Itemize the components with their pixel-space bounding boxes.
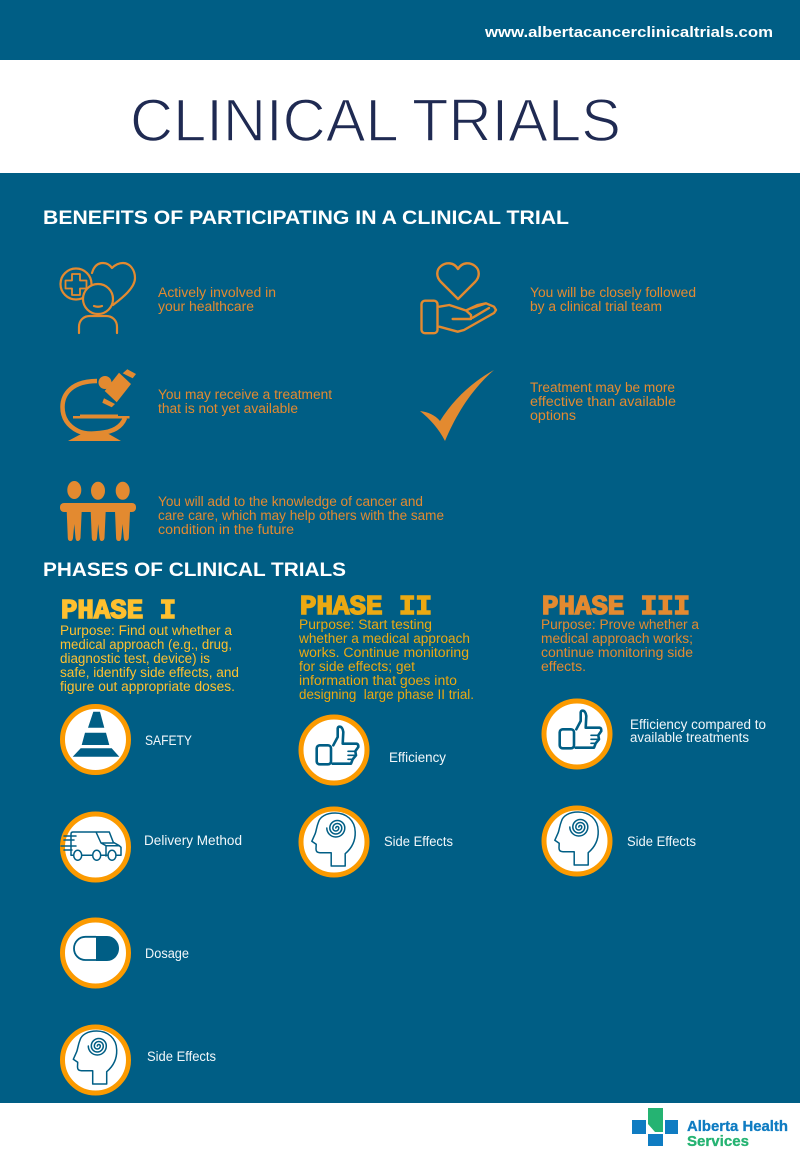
phase II purpose (298, 617, 474, 702)
icon: head with spiral (301, 809, 367, 875)
text: closely followed: You will be closely followed (530, 285, 696, 300)
label: dosage: Dosage (145, 946, 189, 961)
phase I purpose: figure out appropriate doses. (60, 679, 235, 694)
text: closely followed: by a clinical trial team (530, 299, 662, 314)
logo: Alberta Health Services: Services (687, 1134, 749, 1150)
phase I purpose: safe, identify side effects, and (60, 665, 239, 680)
label: safety: SAFETY (145, 733, 192, 748)
heading: benefits: BENEFITS OF PARTICIPATING IN A CLINICAL TRIAL (43, 207, 569, 229)
label: side effects: Side Effects (147, 1049, 216, 1064)
text: more effective (530, 380, 676, 423)
phase III purpose (541, 617, 699, 674)
phase III heading: PHASE III (542, 593, 690, 623)
logo: Alberta Health Services (632, 1108, 788, 1150)
icon: microscope (62, 369, 136, 441)
text: more effective: options (530, 408, 576, 423)
phase III purpose: continue monitoring side (541, 645, 693, 660)
logo: Alberta Health Services: Alberta Health (687, 1119, 788, 1135)
icon: delivery van (61, 814, 128, 880)
phase II purpose: whether a medical approach (298, 631, 470, 646)
icon: thumbs up (544, 701, 610, 767)
phase II purpose: Purpose: Start testing (299, 617, 432, 632)
icon: safety cone (62, 706, 128, 772)
icon: capsule (62, 920, 128, 986)
label: efficiency compared: available treatments (630, 730, 749, 745)
text: more effective: effective than available (530, 394, 676, 409)
label: delivery method: Delivery Method (144, 833, 242, 848)
phase III purpose: effects. (541, 659, 586, 674)
phase II purpose: information that goes into (299, 673, 457, 688)
phase I purpose: diagnostic test, device) is (60, 651, 210, 666)
phase II heading: PHASE II (300, 593, 432, 623)
icon: head with spiral (544, 808, 610, 874)
text: closely followed (530, 285, 696, 314)
icon: head with spiral (62, 1027, 128, 1093)
text: add to knowledge: condition in the future (158, 522, 294, 537)
phase III purpose: medical approach works; (541, 631, 693, 646)
phase I purpose: medical approach (e.g., drug, (60, 637, 232, 652)
panel: benefits (60, 263, 696, 541)
phase I purpose: Purpose: Find out whether a (60, 623, 232, 638)
label: efficiency: Efficiency (389, 750, 446, 765)
title: CLINICAL TRIALS (130, 87, 621, 154)
heading: phases: PHASES OF CLINICAL TRIALS (43, 559, 346, 581)
text: new treatment (158, 387, 332, 416)
phase III purpose: Purpose: Prove whether a (541, 617, 699, 632)
panel: phase III (541, 593, 766, 874)
text: actively involved: your healthcare (158, 299, 254, 314)
icon: three people (60, 481, 136, 541)
website url: www.albertacancerclinicaltrials.com (484, 25, 773, 41)
icon: person with heart and medical cross (60, 263, 135, 333)
text: add to knowledge: You will add to the knowledge of cancer and (158, 494, 423, 509)
phase II purpose: designing large phase II trial. (299, 687, 474, 702)
text: actively involved (158, 285, 276, 314)
text: new treatment: You may receive a treatment (158, 387, 332, 402)
phase I purpose (60, 623, 239, 694)
text: add to knowledge (158, 494, 444, 537)
text: actively involved: Actively involved in (158, 285, 276, 300)
phase I heading: PHASE I (61, 597, 176, 627)
icon: thumbs up (301, 717, 367, 783)
icon: check mark (420, 370, 494, 441)
text: add to knowledge: care care, which may help others with the same (158, 508, 444, 523)
text: new treatment: that is not yet available (158, 401, 298, 416)
label: efficiency compared: Efficiency compared to (630, 717, 766, 732)
text: more effective: Treatment may be more (530, 380, 675, 395)
phase II purpose: works. Continue monitoring (298, 645, 469, 660)
icon: hand holding heart (422, 263, 496, 333)
phase II purpose: for side effects; get (299, 659, 415, 674)
panel: phase I (60, 597, 242, 1093)
label: efficiency compared (630, 717, 766, 745)
label: side effects: Side Effects (627, 834, 696, 849)
label: side effects: Side Effects (384, 834, 453, 849)
panel: phase II (298, 593, 474, 875)
